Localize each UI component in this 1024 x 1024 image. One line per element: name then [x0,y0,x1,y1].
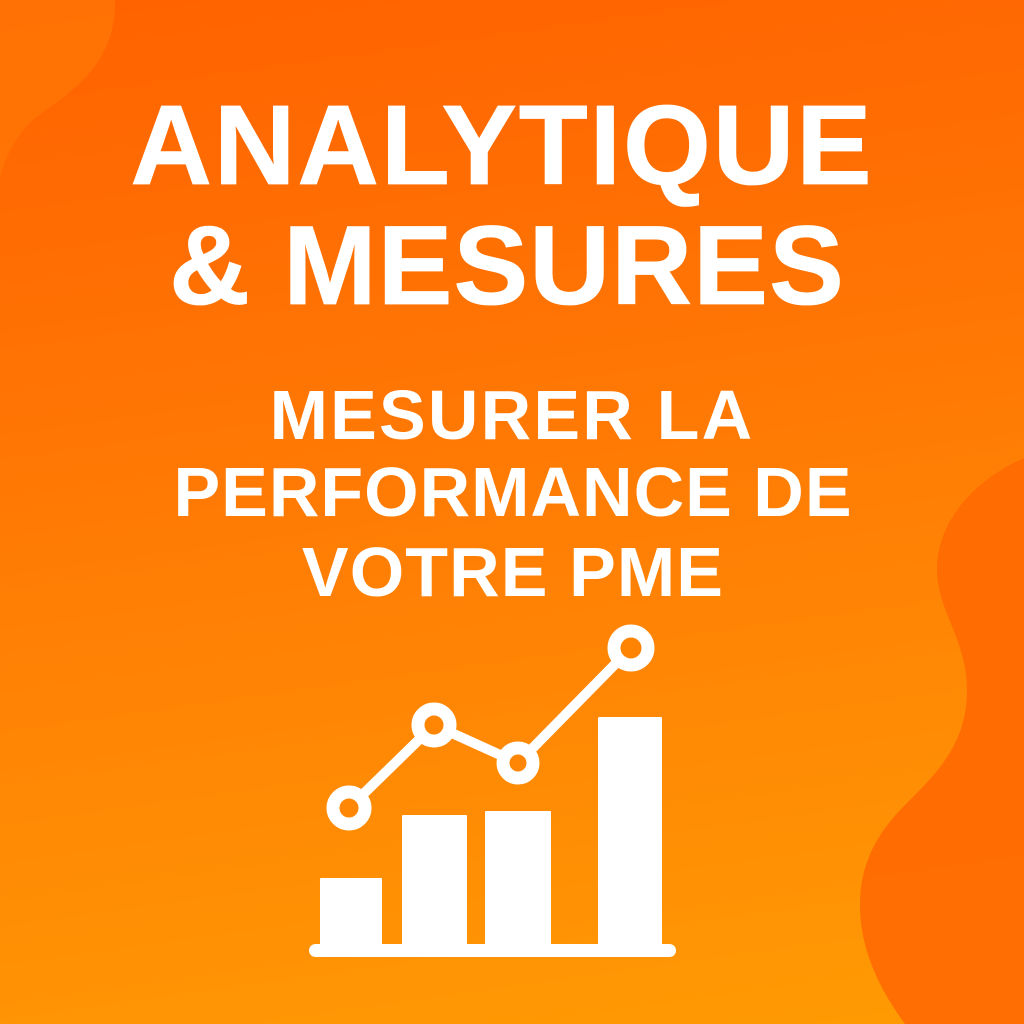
title [130,82,874,328]
title: & MESURES [169,203,845,328]
bars [320,717,662,946]
data points [333,631,648,824]
trend line [349,648,631,808]
subtitle: VOTRE PME [302,533,724,611]
subtitle: PERFORMANCE DE [173,453,853,531]
baseline [309,944,676,957]
title: ANALYTIQUE [130,82,874,208]
icon: bar and line chart [309,624,676,957]
subtitle [173,376,853,611]
subtitle: MESURER LA [270,376,754,454]
